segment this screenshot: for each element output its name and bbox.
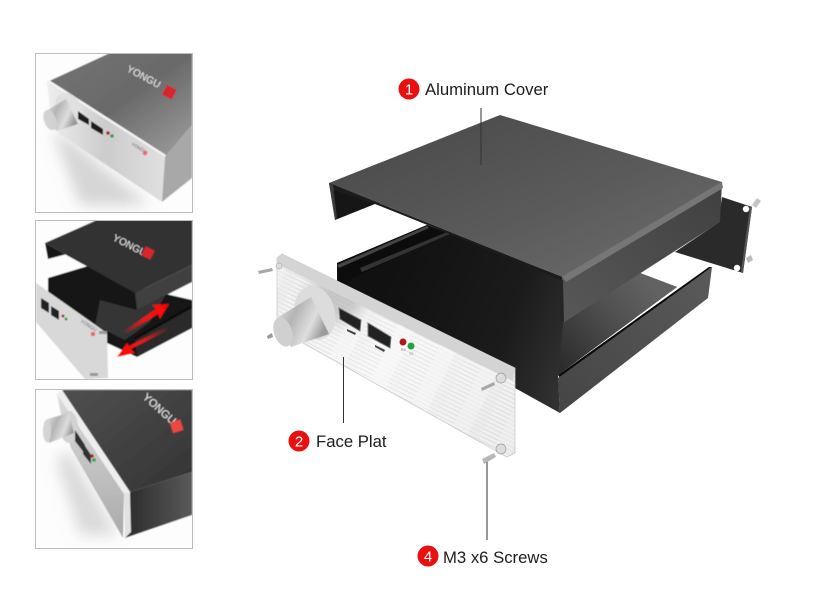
callout: M3 x6 Screws: [418, 462, 548, 567]
callout: M3 x6 Screws: M3 x6 Screws: [443, 548, 548, 567]
status LEDs: RX: [401, 348, 407, 352]
thumbnail: slide-apart assembly with red arrows: YONGU: [79, 319, 98, 334]
status LEDs: TX: [409, 352, 414, 356]
callout: Face Plat: Face Plat: [316, 432, 387, 451]
callout: Aluminum Cover: Aluminum Cover: [425, 80, 549, 99]
exploded view: enclosure base: [337, 225, 712, 413]
thumbnail: assembled enclosure, front view: [36, 53, 192, 212]
callout: Aluminum Cover: 1: [405, 82, 413, 98]
callout: Face Plat: [288, 357, 387, 452]
screws: [258, 263, 506, 464]
callout: Aluminum Cover: [398, 78, 549, 165]
thumbnail: assembled enclosure, front view: YONGU: [125, 64, 162, 91]
exploded view: aluminum cover: [329, 115, 723, 323]
USB ports: [339, 308, 391, 352]
callout: Face Plat: 2: [295, 434, 303, 450]
thumbnail: assembled enclosure, side view: [36, 390, 192, 548]
exploded view: silver face plate: [270, 250, 520, 460]
thumbnail: slide-apart assembly with red arrows: [36, 220, 192, 380]
thumbnail: slide-apart assembly with red arrows: YONGU: [111, 233, 148, 259]
callout: M3 x6 Screws: 4: [424, 548, 432, 566]
thumbnail: assembled enclosure, side view: YONGU: [140, 391, 178, 427]
status LEDs: [400, 338, 414, 356]
thumbnail: assembled enclosure, front view: YONGU: [130, 142, 147, 154]
exploded view: rear panel with screws: [675, 197, 761, 273]
knob: [270, 282, 341, 349]
